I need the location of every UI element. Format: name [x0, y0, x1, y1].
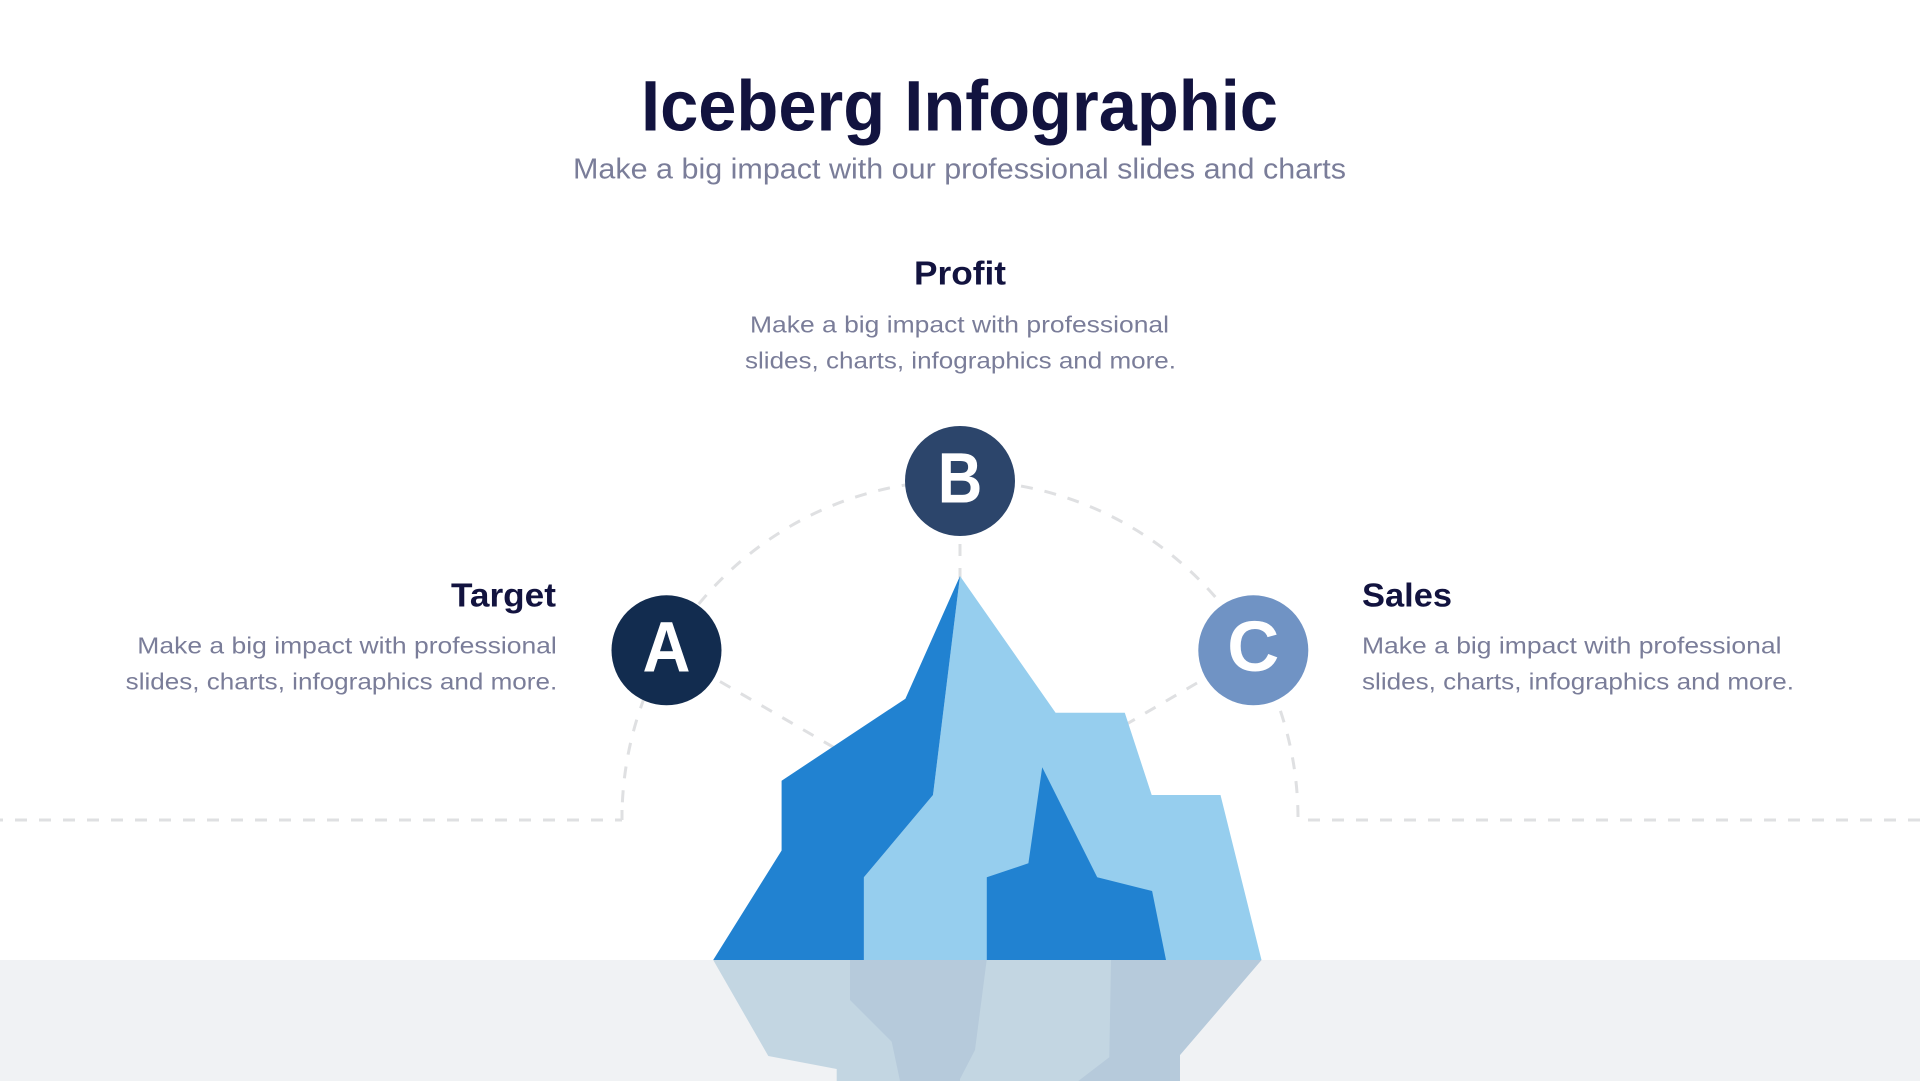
iceberg dark right face: [987, 767, 1166, 960]
submerged dark left part: [850, 960, 987, 1081]
title: Iceberg Infographic: [641, 68, 1278, 147]
heading: Sales: Sales: [1362, 578, 1452, 614]
text block: Target: [126, 578, 557, 694]
text block: Profit: [745, 256, 1176, 374]
water band: [0, 960, 1920, 1081]
body: Profit: slides, charts, infographics and more.: [745, 348, 1176, 374]
badge A: A: [642, 608, 690, 688]
body: Sales: Make a big impact with professional: [1362, 632, 1782, 658]
dashed connector network: [0, 480, 1920, 820]
badge C: C: [1227, 608, 1279, 687]
badge A: [612, 595, 722, 705]
iceberg light face: [864, 576, 1262, 960]
badge B: B: [938, 440, 982, 519]
iceberg below water: [713, 960, 1262, 1081]
badge B: [905, 426, 1015, 536]
submerged dark right part: [1078, 960, 1262, 1081]
body: Sales: slides, charts, infographics and more.: [1362, 668, 1794, 694]
submerged light part: [713, 960, 1262, 1081]
text block: Sales: [1362, 578, 1794, 694]
body: Target: Make a big impact with professional: [137, 632, 557, 658]
heading: Target: Target: [451, 578, 556, 614]
body: Profit: Make a big impact with professional: [750, 312, 1169, 338]
subtitle: Make a big impact with our professional slides and charts: [573, 154, 1346, 186]
iceberg dark left face: [713, 576, 960, 960]
heading: Profit: Profit: [914, 256, 1006, 293]
body: Target: slides, charts, infographics and more.: [126, 668, 557, 694]
iceberg above water: [713, 576, 1262, 960]
badge C: [1198, 595, 1308, 705]
